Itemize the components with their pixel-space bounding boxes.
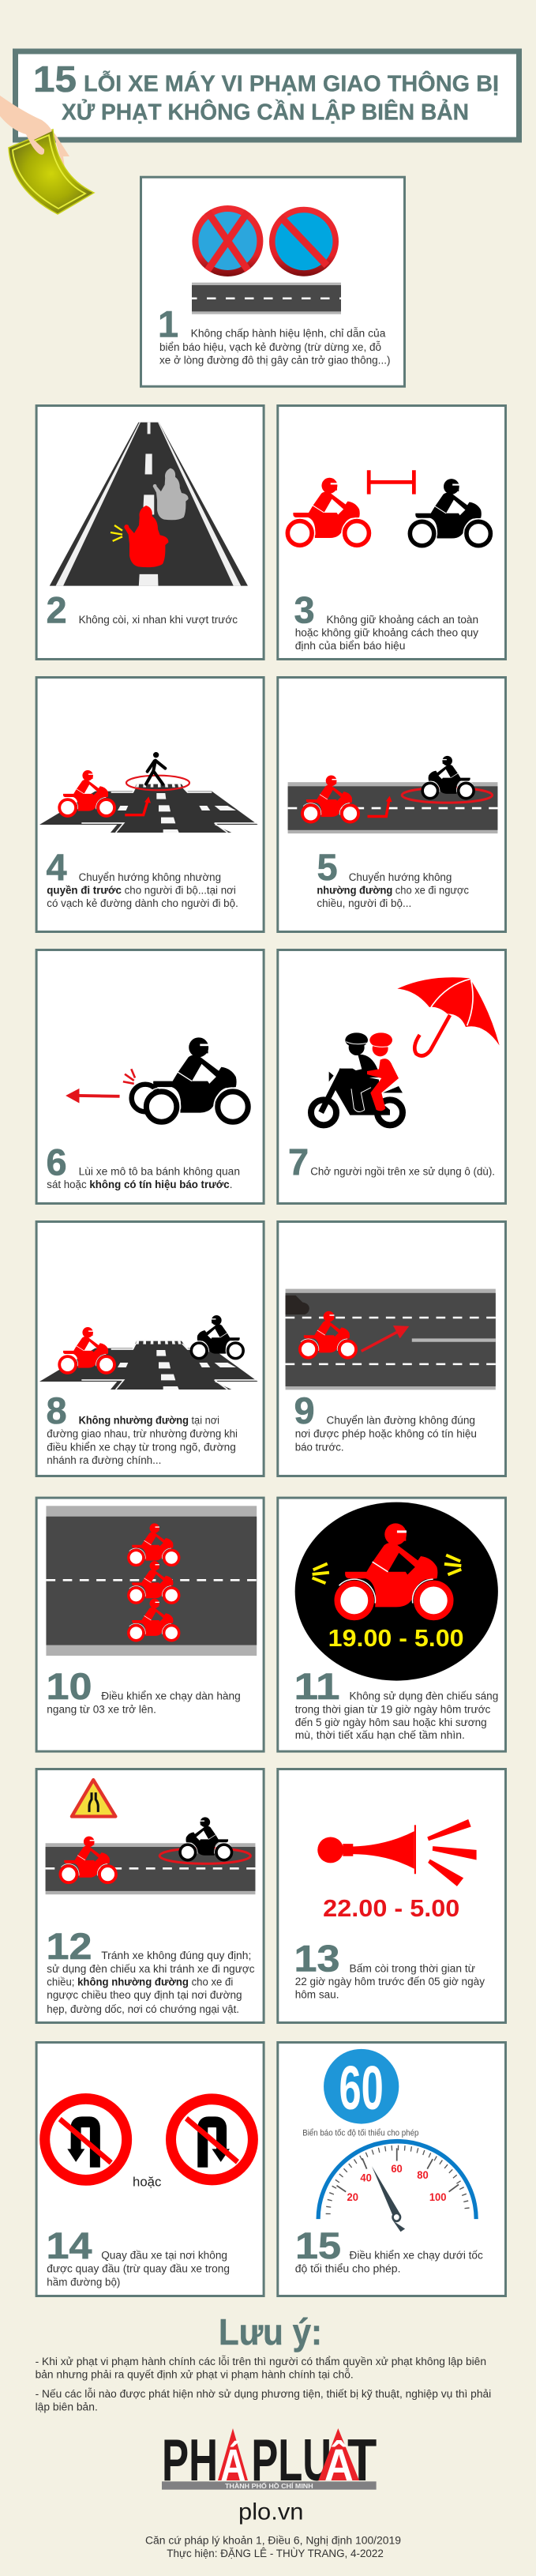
number 7: 7 [288, 1141, 309, 1183]
road and three motorcycles [46, 1506, 257, 1656]
panel 13: horn [278, 1769, 505, 2022]
text 4: quyền đi trước cho người đi bộ...tại nơi [47, 884, 236, 897]
icon: no stopping sign [192, 205, 263, 276]
text 13: Bấm còi trong thời gian từ [349, 1962, 475, 1975]
text 14: được quay đầu (trừ quay đầu xe trong [47, 2263, 230, 2276]
text 10 [47, 1690, 241, 1716]
panel 15: minimum speed [278, 2043, 505, 2296]
text 11: đến 5 giờ ngày hôm sau hoặc khi sương [295, 1717, 487, 1729]
text 12: ngược chiều theo quy định tại nơi đường [47, 1989, 242, 2002]
number 1: 1 [158, 303, 178, 345]
text 11 [295, 1690, 498, 1742]
panel 2: overtaking [36, 406, 264, 659]
sign caption: Biển báo tốc độ tối thiểu cho phép [302, 2128, 419, 2138]
number 5: 5 [317, 846, 338, 888]
text 13: 22 giờ ngày hôm trước đến 05 giờ ngày [295, 1976, 485, 1988]
credits [145, 2534, 401, 2560]
text 5: Chuyển hướng không [349, 871, 452, 884]
icon: horn [317, 1819, 477, 1922]
panel 5: yield oncoming [278, 678, 505, 932]
text 5: nhường đường cho xe đi ngược [317, 884, 469, 897]
panel 14: no U-turn [36, 2043, 264, 2296]
number 15: 15 [295, 2224, 341, 2266]
text 1: biển báo hiệu, vạch kẻ đường (trừ dừng xe, đỗ [159, 340, 381, 354]
reversing tricycle [66, 1037, 248, 1122]
crossing scene [39, 752, 258, 833]
text 5: chiều, người đi bộ... [317, 897, 411, 910]
text 11: Không sử dụng đèn chiếu sáng [349, 1690, 498, 1702]
note text: - Nếu các lỗi nào được phát hiện nhờ sử dụng phương tiện, thiết bị kỹ thuật, nghiệp vụ thì phải [36, 2387, 491, 2401]
panel 6: three-wheel reversing [36, 950, 264, 1204]
speedometer: 80 [417, 2169, 429, 2181]
text 4 [47, 871, 238, 910]
text 13 [295, 1962, 485, 2001]
logo: Pháp Luật: PH [162, 2427, 218, 2493]
intersection scene [39, 1315, 258, 1390]
credits: Căn cứ pháp lý khoản 1, Điều 6, Nghị định 100/2019 [145, 2534, 401, 2547]
text 14: hầm đường bộ) [47, 2276, 120, 2288]
text 6: sát hoặc không có tín hiệu báo trước. [47, 1179, 232, 1191]
text 8: Không nhường đường tại nơi [79, 1415, 219, 1427]
icon: speed sign: 60 [339, 2053, 384, 2123]
text 7: Chở người ngồi trên xe sử dụng ô (dù). [310, 1165, 495, 1178]
night circle [295, 1502, 498, 1681]
text 14: Quay đầu xe tại nơi không [101, 2250, 227, 2262]
text 12: hẹp, đường dốc, nơi có chướng ngại vật. [47, 2003, 239, 2016]
number 9: 9 [294, 1390, 315, 1431]
number 4: 4 [46, 846, 67, 888]
title number: 15 [33, 58, 77, 100]
text 9: Chuyển làn đường không đúng [327, 1415, 475, 1427]
logo: Pháp Luật: Ậ [324, 2439, 354, 2491]
text 14 [47, 2250, 230, 2288]
number 10: 10 [46, 1665, 92, 1707]
logo: Pháp Luật: Á [220, 2440, 246, 2491]
note text: bản nhưng phải ra quyết định xử phạt vi phạm hành chính tại chỗ. [36, 2368, 354, 2382]
text 2: Không còi, xi nhan khi vượt trước [79, 614, 238, 626]
title line 1: LỖI XE MÁY VI PHẠM GIAO THÔNG BỊ [84, 70, 499, 96]
number 6: 6 [46, 1141, 67, 1183]
text 10: Điều khiển xe chạy dàn hàng [101, 1690, 241, 1702]
panel 4: pedestrian [36, 678, 264, 932]
number 13: 13 [294, 1938, 339, 1980]
panel 8: intersection [36, 1221, 264, 1476]
text 3: hoặc không giữ khoảng cách theo quy [295, 627, 479, 640]
icon: speed sign [324, 2049, 399, 2124]
text 12: chiều; không nhường đường cho xe đi [47, 1976, 233, 1988]
number 14: 14 [46, 2224, 92, 2266]
text 8: nhánh ra đường chính... [47, 1454, 161, 1467]
text 1: xe ở lòng đường đô thị gây cản trở giao thông...) [159, 355, 390, 367]
text 9: báo trước. [295, 1441, 344, 1453]
icon: warning sign [72, 1780, 115, 1816]
text 11: mù, thời tiết xấu hạn chế tầm nhìn. [295, 1729, 465, 1742]
text 5 [317, 871, 469, 910]
number 2: 2 [46, 589, 67, 630]
text 1: Không chấp hành hiệu lệnh, chỉ dẫn của [191, 327, 386, 340]
panel 1: signs [141, 177, 404, 386]
text 3: Không giữ khoảng cách an toàn [327, 614, 478, 626]
motorcycle gray [153, 468, 189, 520]
title line 2: XỬ PHẠT KHÔNG CẦN LẬP BIÊN BẢN [62, 99, 469, 126]
text 13: hôm sau. [295, 1988, 339, 2001]
sign and speedometer [302, 2049, 476, 2232]
text 8: đường giao nhau, trừ nhường đường khi [47, 1428, 238, 1441]
icon: no parking sign [269, 207, 339, 276]
text 12: sử dụng đèn chiếu xa khi tránh xe đi ngược [47, 1963, 255, 1976]
speedometer: 40 [360, 2172, 372, 2183]
credits: Thực hiện: ĐẶNG LÊ - THÙY TRANG, 4-2022 [167, 2547, 384, 2560]
pedestrian [146, 752, 165, 784]
title box [16, 51, 519, 140]
lane change scene [286, 1289, 496, 1390]
no U-turn signs [45, 2099, 253, 2190]
text 1 [159, 327, 390, 367]
text 12: Tránh xe không đúng quy định; [101, 1950, 251, 1962]
riders and umbrella [311, 977, 500, 1125]
panel 11: lights at night [278, 1498, 505, 1751]
speedometer: 20 [347, 2191, 358, 2203]
text 6 [47, 1165, 240, 1191]
logo: Pháp Luật: PLU [251, 2427, 332, 2493]
road in perspective [50, 423, 248, 586]
icon: hand holding money [0, 96, 94, 214]
text 8 [47, 1415, 238, 1467]
logo: Pháp Luật [162, 2427, 377, 2493]
text 15: Điều khiển xe chạy dưới tốc [349, 2250, 483, 2262]
speedometer: 60 [391, 2163, 403, 2175]
turn signal flash [111, 525, 122, 541]
text 6: Lùi xe mô tô ba bánh không quan [79, 1165, 240, 1178]
text 10: ngang từ 03 xe trở lên. [47, 1703, 156, 1716]
number 8: 8 [46, 1390, 67, 1431]
road [192, 283, 341, 314]
text 12 [47, 1950, 255, 2016]
narrow road scene [46, 1780, 255, 1894]
note text [36, 2355, 491, 2414]
text 8: điều khiển xe chạy từ trong ngõ, đường [47, 1441, 236, 1453]
no U-turn signs: hoặc [133, 2174, 161, 2190]
number 11: 11 [294, 1665, 339, 1707]
motorcycle red [124, 506, 168, 567]
panel 3: distance [278, 406, 505, 659]
website: plo.vn [238, 2499, 303, 2525]
text 15: độ tối thiểu cho phép. [295, 2263, 401, 2276]
panel 12: passing [36, 1769, 264, 2022]
road scene [288, 756, 497, 833]
text 3 [295, 614, 479, 652]
text 4: Chuyển hướng không nhường [79, 871, 221, 884]
motorcycles and distance mark [287, 470, 490, 546]
speedometer [318, 2142, 476, 2232]
note text: - Khi xử phạt vi phạm hành chính các lỗi trên thì người có thẩm quyền xử phạt không lập biên [36, 2355, 486, 2368]
panel 10: three abreast [36, 1498, 264, 1751]
logo: Pháp Luật: T [347, 2427, 377, 2493]
text 9 [295, 1415, 477, 1453]
text 3: định của biển báo hiệu [295, 640, 406, 652]
speedometer: 100 [429, 2191, 447, 2203]
panel 7: umbrella [278, 950, 505, 1204]
icon: horn: 22.00 - 5.00 [323, 1896, 459, 1922]
logo: Pháp Luật: THÀNH PHỐ HỒ CHÍ MINH [225, 2482, 313, 2490]
note heading: Lưu ý: [219, 2311, 322, 2352]
text 15 [295, 2250, 483, 2276]
note text: lập biên bản. [36, 2401, 98, 2414]
number 12: 12 [46, 1925, 92, 1967]
text 11: trong thời gian từ 19 giờ ngày hôm trước [295, 1703, 490, 1716]
panel 9: lane change [278, 1221, 505, 1476]
text 4: có vạch kẻ đường dành cho người đi bộ. [47, 897, 238, 910]
number 3: 3 [294, 589, 315, 630]
night circle: 19.00 - 5.00 [328, 1626, 464, 1652]
text 9: nơi được phép hoặc không có tín hiệu [295, 1428, 477, 1441]
